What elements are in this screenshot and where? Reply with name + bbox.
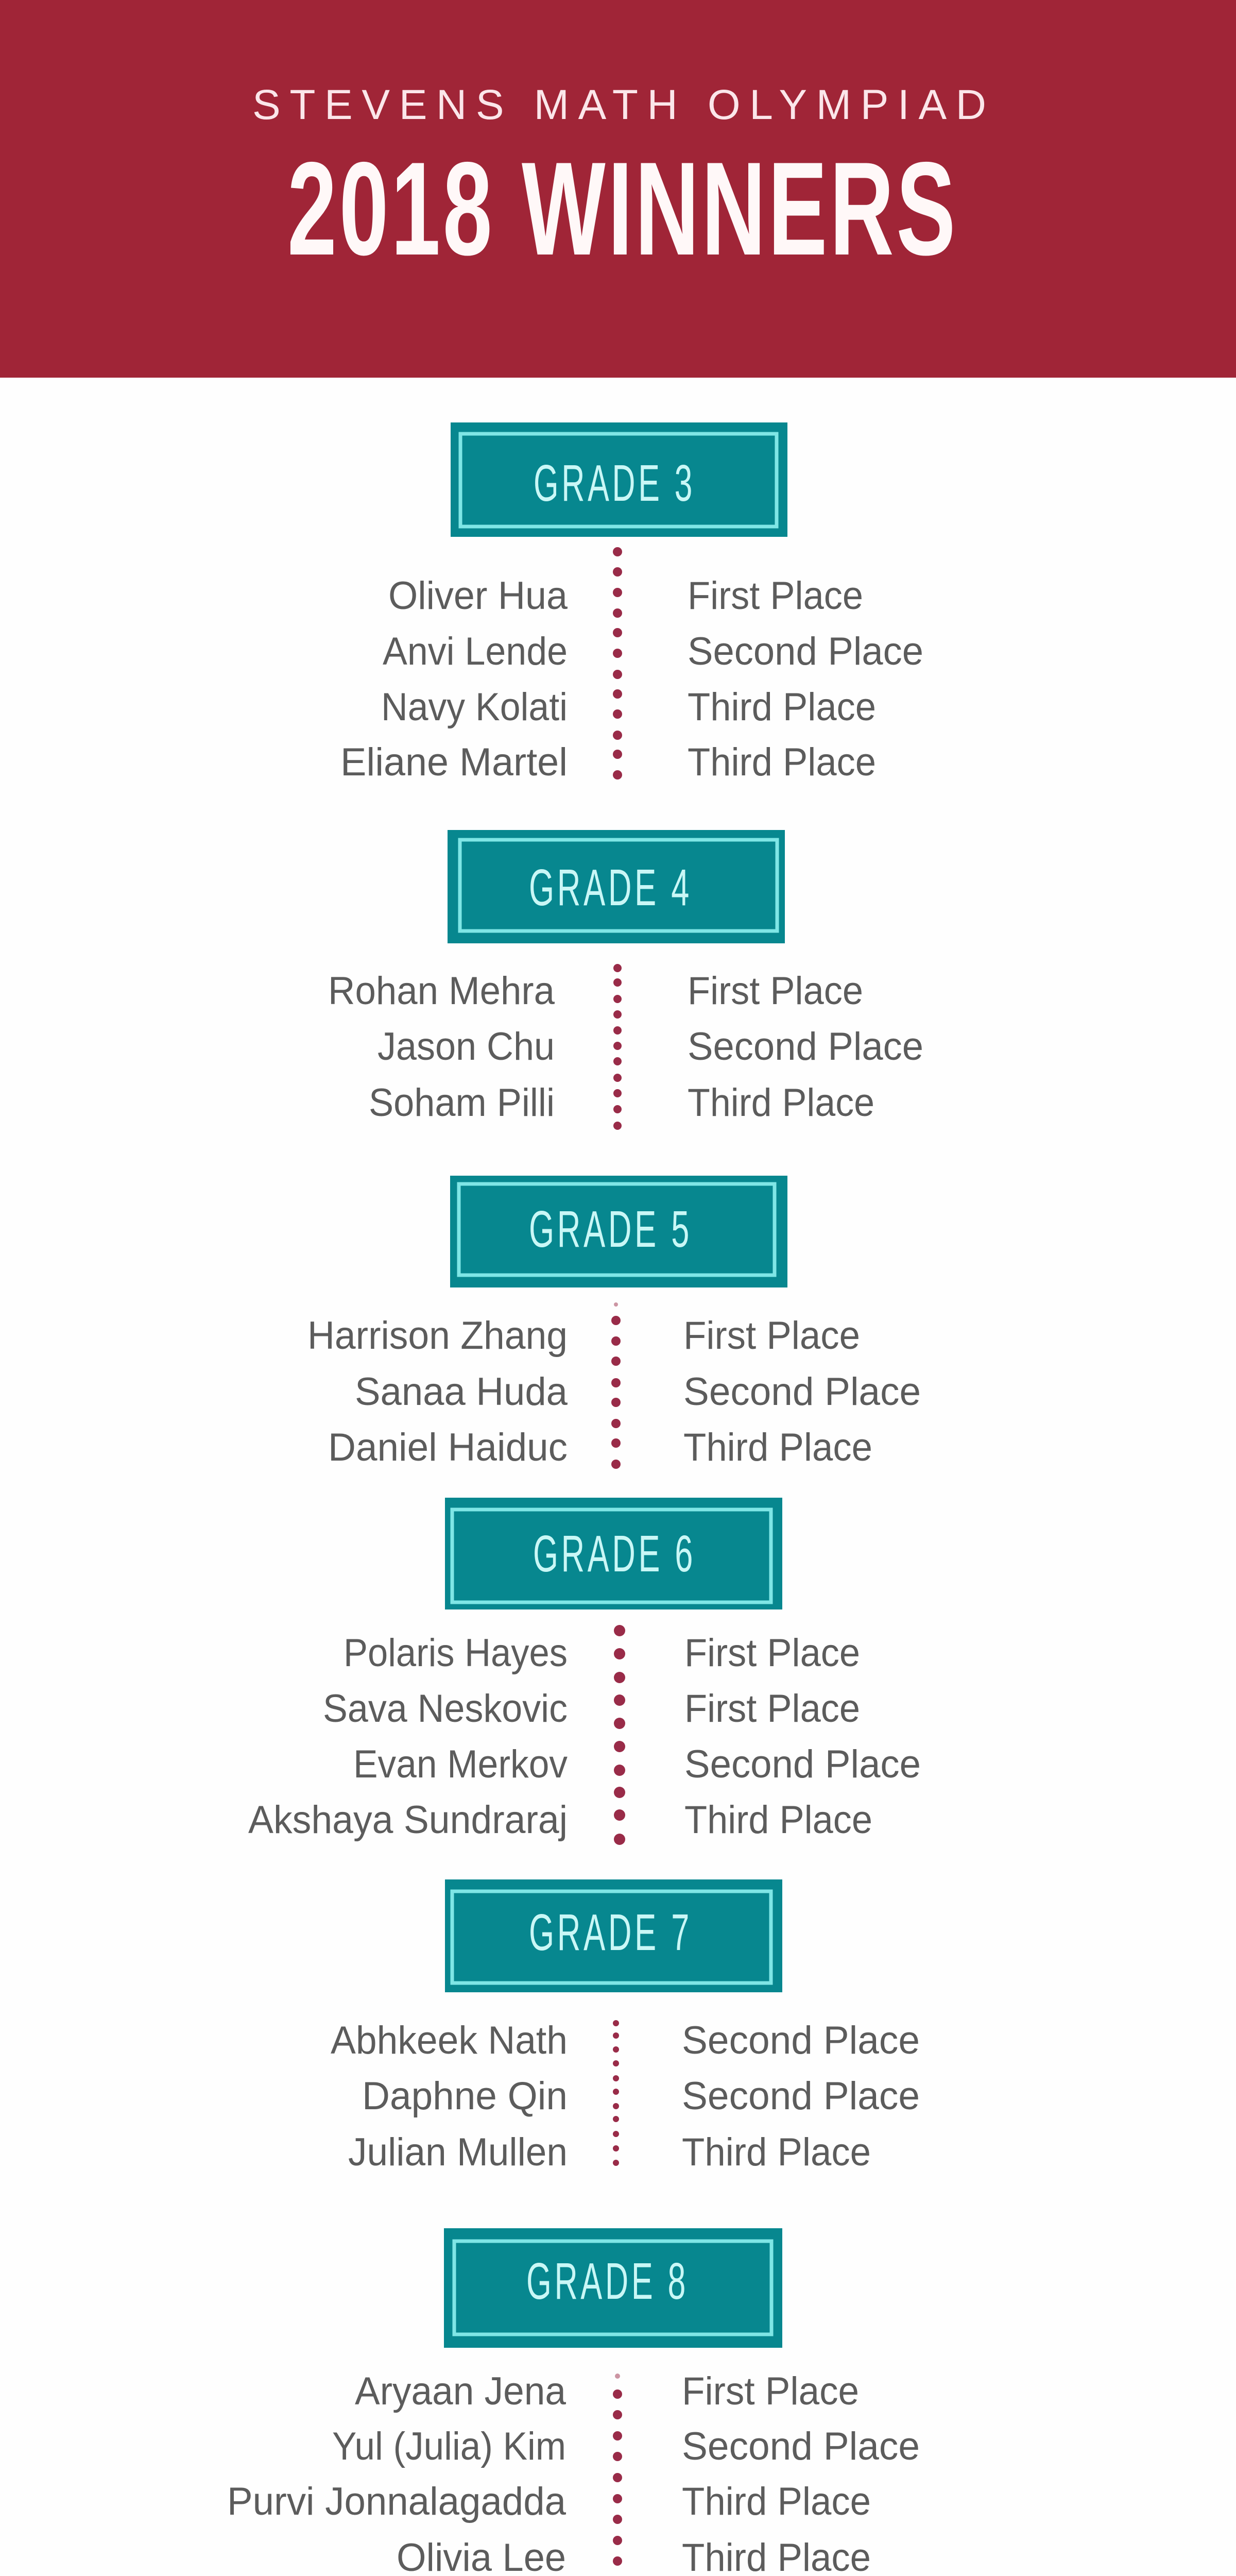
placements: Second Place [682, 2074, 920, 2118]
winner names [307, 1314, 568, 1469]
placements [682, 2019, 920, 2174]
winner names [340, 574, 568, 784]
placements: Third Place [688, 1081, 874, 1125]
panel: grade 7 [331, 1879, 920, 2174]
panel: grade 3 [340, 422, 923, 784]
winner names: Eliane Martel [340, 740, 568, 784]
panel: grade 6 [248, 1498, 921, 1845]
panel: grade 8 [227, 2228, 920, 2576]
placements [688, 574, 923, 784]
placements: Second Place [682, 2425, 920, 2468]
winner names: Anvi Lende [383, 630, 568, 673]
heading: grade 5 badge [450, 1176, 787, 1287]
dotted divider [613, 964, 622, 1130]
heading: grade 3 badge [451, 422, 787, 537]
panel: header banner [0, 0, 1236, 378]
dotted divider [613, 547, 622, 779]
placements: First Place [682, 2369, 859, 2413]
winner names: Yul (Julia) Kim [332, 2425, 566, 2468]
placements: First Place [688, 574, 863, 618]
placements: Second Place [682, 2019, 920, 2062]
winner names: Sava Neskovic [323, 1687, 568, 1731]
placements: Third Place [688, 740, 876, 784]
winner names: Navy Kolati [381, 685, 568, 729]
winner names: Harrison Zhang [307, 1314, 568, 1358]
placements: Second Place [684, 1742, 921, 1786]
heading: grade 8 badge: GRADE 8 [526, 2252, 689, 2310]
winner names [331, 2019, 568, 2174]
winner names: Aryaan Jena [355, 2369, 566, 2413]
winner names: Evan Merkov [353, 1742, 568, 1786]
placements: Third Place [683, 1426, 872, 1469]
heading: grade 5 badge: GRADE 5 [529, 1200, 692, 1258]
heading: grade 3 badge: GRADE 3 [534, 454, 695, 512]
winner names: Oliver Hua [388, 574, 568, 618]
winner names [248, 1631, 568, 1842]
placements: First Place [684, 1687, 860, 1731]
placements: Second Place [683, 1370, 921, 1414]
winner names: Polaris Hayes [344, 1631, 568, 1675]
heading: grade 7 badge: GRADE 7 [529, 1904, 692, 1961]
placements: First Place [688, 969, 863, 1013]
heading: grade 4 badge [448, 830, 785, 943]
placements [688, 969, 923, 1125]
placements: First Place [683, 1314, 860, 1358]
winner names: Daniel Haiduc [328, 1426, 568, 1469]
winner names [328, 969, 555, 1125]
placements: Second Place [688, 1025, 923, 1069]
dotted divider [613, 2374, 622, 2576]
heading: grade 4 badge: GRADE 4 [529, 859, 692, 917]
heading: grade 6 badge: GRADE 6 [533, 1525, 696, 1583]
dotted divider [614, 1625, 625, 1845]
heading: grade 8 badge [444, 2228, 782, 2348]
winner names [227, 2369, 566, 2576]
heading: grade 6 badge [445, 1498, 782, 1609]
placements [684, 1631, 921, 1842]
panel: grade 4 [328, 830, 923, 1130]
subtitle: STEVENS MATH OLYMPIAD [252, 81, 986, 128]
winner names: Purvi Jonnalagadda [227, 2480, 566, 2523]
placements: Third Place [684, 1798, 872, 1842]
winner names: Akshaya Sundraraj [248, 1798, 568, 1842]
placements [683, 1314, 921, 1469]
panel: grade 5 [307, 1176, 921, 1469]
winner names: Jason Chu [377, 1025, 555, 1069]
winner names: Rohan Mehra [328, 969, 555, 1013]
dotted divider [611, 1302, 621, 1469]
winner names: Julian Mullen [348, 2130, 568, 2174]
placements [682, 2369, 920, 2576]
winner names: Abhkeek Nath [331, 2019, 568, 2062]
winner names: Sanaa Huda [355, 1370, 568, 1414]
placements: Third Place [682, 2130, 871, 2174]
placements: Third Place [682, 2480, 871, 2523]
dotted divider [613, 2020, 619, 2166]
placements: Third Place [688, 685, 876, 729]
winner names: Daphne Qin [362, 2074, 568, 2118]
placements: Second Place [688, 630, 923, 673]
winner names: Soham Pilli [369, 1081, 555, 1125]
heading: grade 7 badge [445, 1879, 782, 1992]
placements: First Place [684, 1631, 860, 1675]
